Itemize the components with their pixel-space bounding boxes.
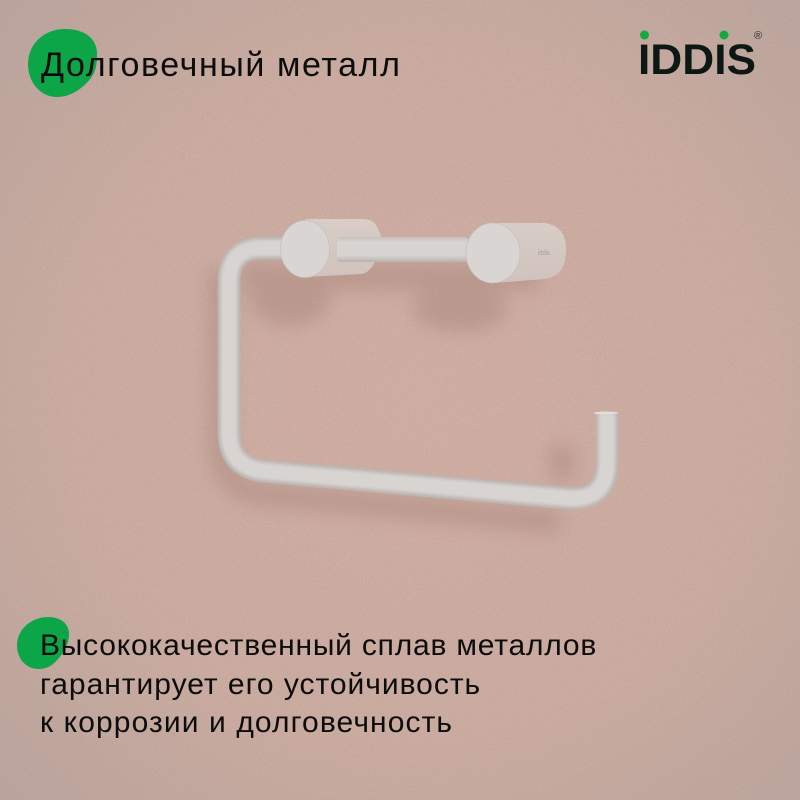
description text: Высококачественный сплав металлов (40, 629, 597, 662)
description text (40, 629, 597, 739)
right mount (466, 223, 566, 283)
tube end cap (594, 412, 618, 414)
mount engraving: iddis (538, 250, 550, 257)
middle tube (337, 237, 468, 262)
green blob: heading (28, 29, 97, 97)
heading: Долговечный металл (41, 46, 402, 84)
green blob: description (17, 617, 69, 669)
left mount (280, 219, 381, 278)
description text: к коррозии и долговечность (40, 706, 453, 739)
registered mark: ® (754, 30, 762, 42)
paper holder (229, 219, 618, 498)
tube: main loop (229, 248, 607, 498)
wall shadow of holder (220, 270, 562, 522)
logo dots (640, 30, 728, 40)
logo: IDDIS (638, 36, 756, 84)
description text: гарантирует его устойчивость (40, 668, 481, 700)
